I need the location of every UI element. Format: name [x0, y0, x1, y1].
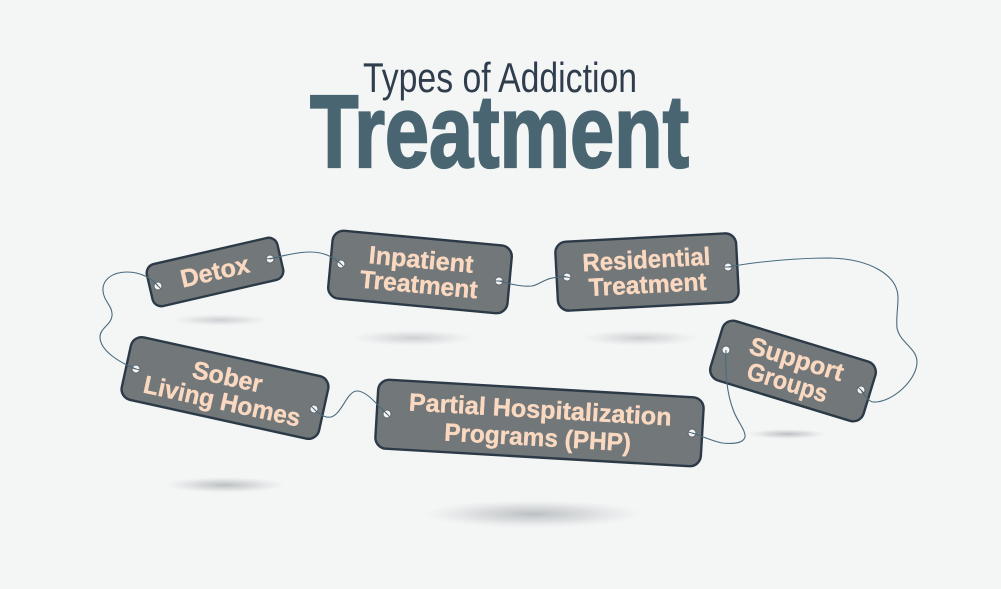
title line: Types of Addiction: Types of Addiction	[363, 54, 637, 101]
wire: Detox to Sober Living Homes	[100, 272, 158, 369]
shadow: Partial Hospitalization Programs	[423, 500, 643, 528]
shadow: Support Groups	[747, 429, 827, 439]
tag: Support Groups	[707, 318, 879, 424]
tag: Detox: Detox	[178, 250, 252, 294]
tag: Inpatient Treatment: Treatment	[359, 266, 480, 304]
tag: Inpatient Treatment: Inpatient	[368, 241, 475, 279]
wires connecting the tags	[100, 252, 917, 443]
tag: Support Groups: Support	[746, 332, 848, 387]
title line: Treatment: Treatment	[310, 74, 689, 189]
tag: Partial Hospitalization Programs (PHP): Programs (PHP)	[443, 419, 632, 457]
tag: Residential Treatment	[555, 233, 739, 311]
tag: Residential Treatment: Treatment	[588, 268, 708, 302]
tag: Detox	[145, 236, 285, 308]
tag: Sober Living Homes: Sober	[190, 356, 265, 399]
wire: Inpatient to Residential	[499, 277, 567, 286]
tag: Support Groups: Groups	[744, 357, 831, 408]
shadow: Sober Living Homes	[165, 477, 285, 493]
shadow: Residential Treatment	[580, 330, 700, 346]
wire: Sober Living Homes to PHP	[314, 391, 387, 417]
wire: Support Groups to PHP	[692, 350, 745, 443]
tag: Sober Living Homes: Living Homes	[141, 371, 303, 433]
shadow: Detox	[170, 314, 270, 326]
title	[310, 54, 689, 189]
shadow: Inpatient Treatment	[351, 330, 475, 346]
tag: Partial Hospitalization Programs (PHP): Partial Hospitalization	[408, 388, 672, 432]
wire: Residential to Support Groups	[728, 258, 917, 402]
tag: Partial Hospitalization Programs (PHP)	[375, 379, 704, 467]
tag: Sober Living Homes	[119, 335, 331, 441]
tag: Residential Treatment: Residential	[582, 243, 711, 277]
wire: Detox to Inpatient	[270, 252, 341, 264]
tag: Inpatient Treatment	[327, 230, 513, 314]
